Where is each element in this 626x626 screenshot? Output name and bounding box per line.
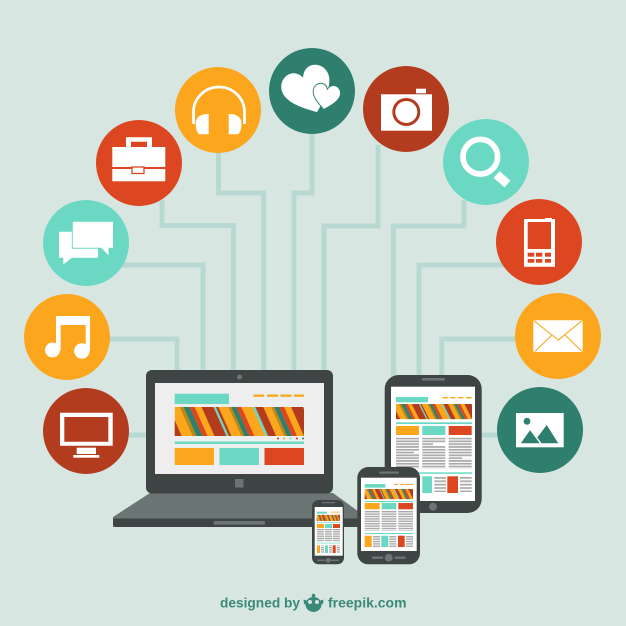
laptop screen xyxy=(155,383,324,474)
icon circle: music xyxy=(24,294,110,380)
icon circle: magnifier xyxy=(443,119,529,205)
medium phone screen xyxy=(360,478,419,551)
medium phone xyxy=(357,467,420,564)
icon circle: envelope xyxy=(515,293,601,379)
icon circle: chat xyxy=(43,200,129,286)
tablet xyxy=(385,375,482,513)
credit text: designed by: designed by xyxy=(220,596,300,610)
icon circle: picture xyxy=(497,387,583,473)
footer credit xyxy=(220,594,406,612)
tablet screen xyxy=(388,387,481,501)
small phone xyxy=(312,500,344,564)
icon: freepik logo xyxy=(304,594,324,612)
icon circle: headphones xyxy=(175,67,261,153)
connector lines xyxy=(105,130,520,435)
credit text: freepik.com: freepik.com xyxy=(328,596,406,610)
icon circle: hearts xyxy=(269,48,355,134)
laptop lid xyxy=(146,370,333,494)
laptop base xyxy=(113,493,366,527)
icon circle: monitor xyxy=(43,388,129,474)
laptop xyxy=(113,370,366,527)
icon circle: camera xyxy=(363,66,449,152)
icon circle: briefcase xyxy=(96,120,182,206)
small phone screen xyxy=(314,507,343,556)
icon circle: mobile phone xyxy=(496,199,582,285)
